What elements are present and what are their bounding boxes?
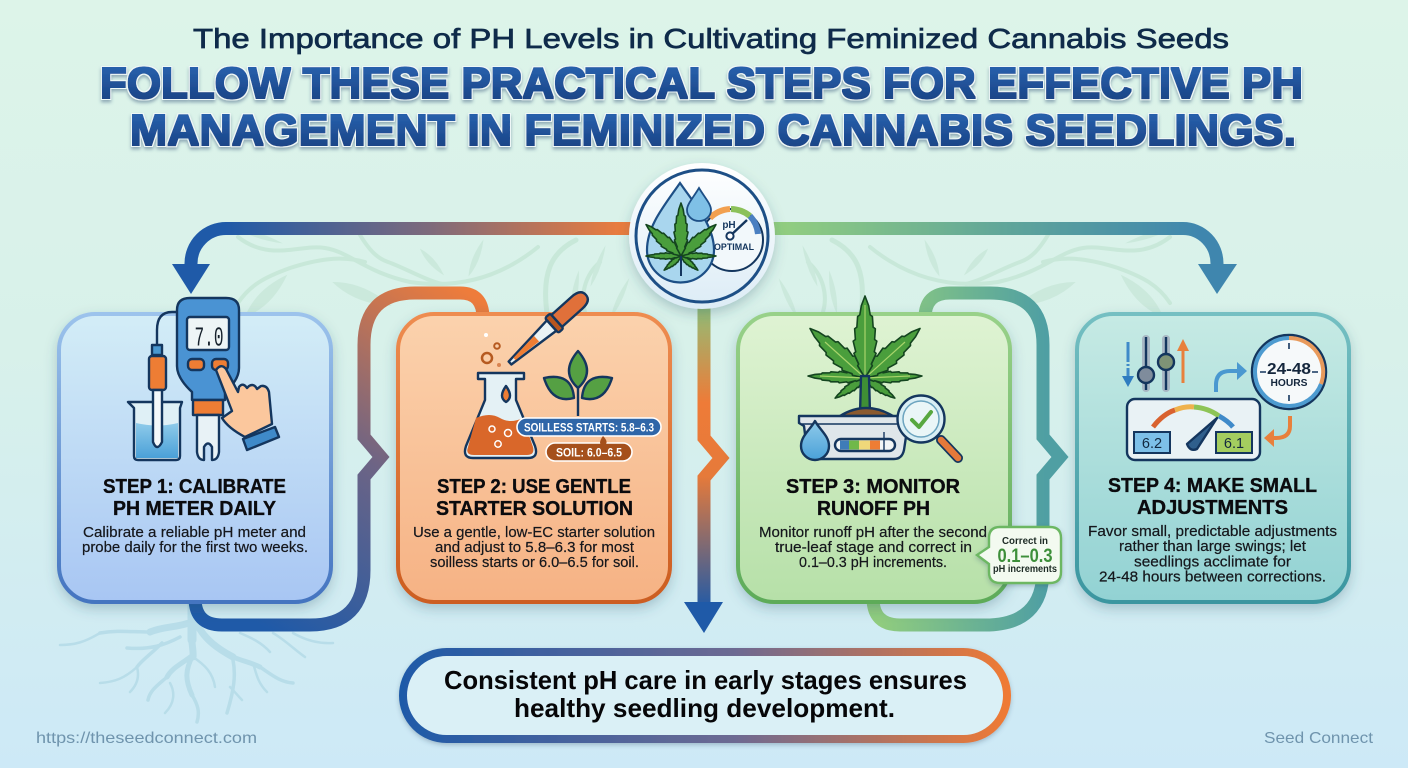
icon: large water drop (647, 183, 714, 282)
heading: step 2 (436, 475, 633, 520)
icon: small water drop (687, 188, 711, 221)
background tree roots (60, 600, 333, 722)
footer: brand: Seed Connect (1264, 730, 1374, 747)
text: step 2 body: Use a gentle, low-EC starter solution (413, 525, 655, 541)
icon: cannabis leaf (642, 203, 720, 276)
icon: gauge (701, 209, 763, 271)
callout: soilless range: SOILLESS STARTS: 5.8–6.3 (524, 422, 654, 434)
icon: cannabis seedling with tray and magnifier (799, 296, 958, 460)
heading: step 1: STEP 1: CALIBRATE (103, 475, 286, 498)
text: step 1 body (82, 525, 308, 556)
footer: url: https://theseedconnect.com (36, 730, 257, 747)
text: step 2 body: soilless starts or 6.0–6.5 for soil. (430, 555, 639, 571)
summary pill (403, 652, 1007, 739)
text: step 1 body: Calibrate a reliable pH meter and (83, 525, 306, 541)
callout: correction increments (977, 527, 1061, 583)
text: step 4 body: 24-48 hours between corrections. (1099, 570, 1326, 586)
headline: MANAGEMENT IN FEMINIZED CANNABIS SEEDLINGS. (130, 106, 1296, 155)
connector: top right arrow from badge to step 4 (770, 228, 1237, 294)
text: step 4 body: seedlings acclimate for (1134, 554, 1291, 570)
heading: step 1 (103, 475, 286, 520)
headline (100, 59, 1303, 155)
text: step 4 body: rather than large swings; let (1119, 539, 1306, 555)
panel: step 2 (398, 287, 670, 602)
headline: FOLLOW THESE PRACTICAL STEPS FOR EFFECTIVE PH (100, 59, 1303, 108)
panel: step 1 (59, 298, 331, 602)
heading: step 3: STEP 3: MONITOR (786, 475, 960, 498)
central badge: pH optimal (629, 163, 775, 309)
panel: step 3 (738, 296, 1010, 602)
text: step 1 body: probe daily for the first two weeks. (82, 540, 308, 556)
icon: clock: HOURS (1270, 377, 1308, 389)
text: step 3 body: 0.1–0.3 pH increments. (799, 555, 947, 571)
heading: step 3 (786, 475, 960, 520)
callout: soil range: SOIL: 6.0–6.5 (556, 448, 623, 460)
text: step 3 body (759, 525, 987, 571)
icon: clock (1252, 335, 1326, 409)
callout: soil range (546, 443, 632, 461)
icon: pH meter and beaker (128, 298, 279, 460)
background tree branches (236, 226, 1172, 321)
gauge label: pH: pH (722, 220, 736, 231)
summary pill: Consistent pH care in early stages ensures (444, 665, 967, 695)
icon: gauge panel: 6.1 (1224, 436, 1244, 452)
text: step 3 body: Monitor runoff pH after the second (759, 525, 987, 541)
connector: centre arrow down to summary (684, 300, 723, 633)
heading: step 4: STEP 4: MAKE SMALL (1108, 474, 1317, 497)
text: step 2 body: and adjust to 5.8–6.3 for most (435, 540, 634, 556)
summary pill: healthy seedling development. (514, 693, 895, 723)
panel: step 4 (1077, 314, 1349, 602)
heading: step 2: STEP 2: USE GENTLE (437, 475, 631, 498)
icon: gauge panel: 6.2 (1142, 436, 1162, 452)
callout: correction increments: pH increments (993, 564, 1057, 575)
heading: step 4: ADJUSTMENTS (1137, 496, 1288, 519)
icon: dropper (503, 287, 592, 370)
icon: clock: 24-48 (1267, 361, 1311, 378)
callout: soilless range (517, 418, 661, 436)
heading: step 4 (1108, 474, 1317, 519)
text: step 4 body (1088, 524, 1337, 586)
heading: step 1: PH METER DAILY (113, 497, 276, 520)
icon: gauge panel (1127, 399, 1260, 460)
icon: sliders, gauge and clock (1122, 335, 1326, 460)
text: step 4 body: Favor small, predictable adjustments (1088, 524, 1337, 540)
callout: correction increments: 0.1–0.3 (998, 545, 1053, 567)
connector: step 1 to step 2 (195, 293, 483, 625)
title: The Importance of PH Levels in Cultivating Feminized Cannabis Seeds (193, 23, 1229, 54)
gauge label: optimal: OPTIMAL (714, 242, 754, 253)
icon: dropper, flask and seedling (465, 287, 661, 461)
text: step 2 body (413, 525, 655, 571)
text: step 3 body: true-leaf stage and correct in (775, 540, 972, 556)
callout: correction increments: Correct in (1002, 535, 1048, 547)
meter reading: 7.0 (194, 324, 224, 354)
connector: top left arrow from badge to step 1 (172, 228, 640, 294)
connector: step 3 to step 4 (873, 293, 1060, 625)
heading: step 2: STARTER SOLUTION (436, 497, 633, 520)
heading: step 3: RUNOFF PH (817, 497, 930, 520)
